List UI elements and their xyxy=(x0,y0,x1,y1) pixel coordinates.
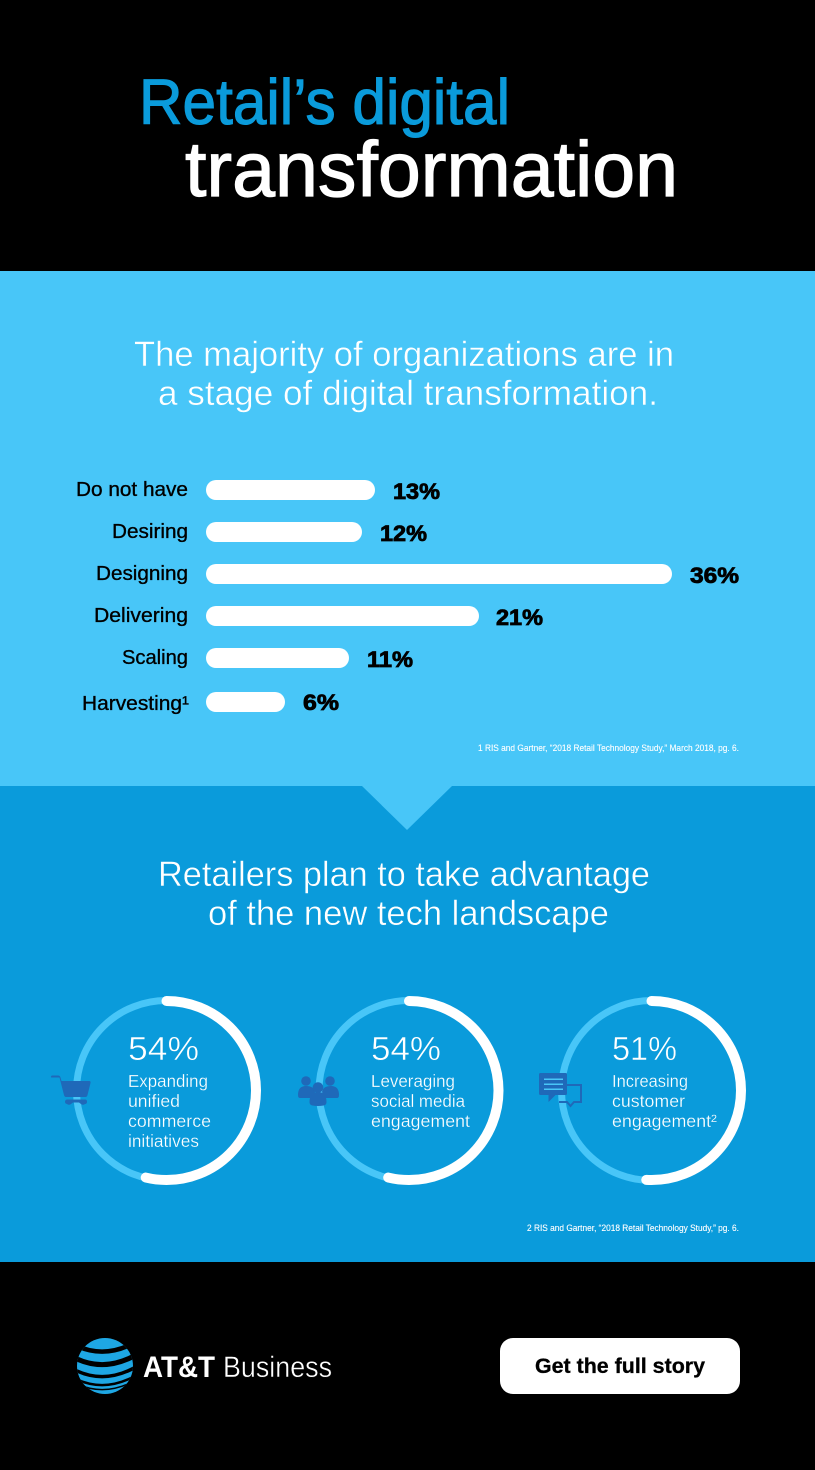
donut: customer engagement 51% xyxy=(539,1000,742,1180)
bar labels: Harvesting¹ xyxy=(82,692,189,715)
bar values: 6% xyxy=(303,690,339,715)
title: transformation xyxy=(185,125,678,213)
logo: AT&T Business xyxy=(72,1338,332,1394)
icon: chat bubbles xyxy=(539,1073,581,1106)
donut: customer engagement 51%: Increasing xyxy=(612,1071,688,1091)
bar labels: Desiring xyxy=(112,520,188,543)
bar values xyxy=(303,479,739,715)
panel: digital transformation stages xyxy=(0,271,815,787)
heading: majority of organizations: The majority of organizations are in xyxy=(134,335,674,374)
panel: tech landscape plans xyxy=(0,786,815,1262)
donut: customer engagement 51%: customer xyxy=(612,1091,685,1111)
heading: retailers plan: Retailers plan to take advantage xyxy=(158,855,650,894)
title: Retail’s digital xyxy=(139,66,510,138)
donut: social media 54%: social media xyxy=(371,1091,465,1111)
donut: social media 54% xyxy=(298,1000,499,1180)
bar values: 13% xyxy=(393,479,440,504)
bar values: 36% xyxy=(690,563,739,588)
footnote 2: 2 RIS and Gartner, “2018 Retail Technology Study,” pg. 6. xyxy=(527,1223,739,1233)
heading: retailers plan: of the new tech landscape xyxy=(208,894,609,933)
pointer triangle xyxy=(362,786,452,830)
donut: customer engagement 51%: 51% xyxy=(612,1030,677,1067)
donut: unified commerce 54%: unified xyxy=(128,1091,180,1111)
bar labels: Designing xyxy=(96,562,188,585)
bar labels: Do not have xyxy=(76,478,188,501)
bar labels: Delivering xyxy=(94,604,188,627)
bar labels xyxy=(76,478,189,715)
donut: unified commerce 54%: Expanding xyxy=(128,1071,208,1091)
logo: AT&T Business: AT&T xyxy=(143,1351,215,1384)
footnote 1: 1 RIS and Gartner, “2018 Retail Technology Study,” March 2018, pg. 6. xyxy=(478,743,739,753)
donut: social media 54%: Leveraging xyxy=(371,1071,455,1091)
bar labels: Scaling xyxy=(122,646,188,669)
button: get the full story: Get the full story xyxy=(535,1355,705,1378)
button: get the full story xyxy=(500,1338,740,1394)
title xyxy=(139,66,678,213)
heading: majority of organizations: a stage of digital transformation. xyxy=(158,374,658,413)
donut: unified commerce 54%: initiatives xyxy=(128,1131,199,1151)
donut: customer engagement 51%: engagement² xyxy=(612,1111,717,1131)
logo: AT&T Business: Business xyxy=(223,1351,332,1384)
icon: globe xyxy=(77,1338,133,1394)
bar values: 12% xyxy=(380,521,427,546)
icon: shopping cart xyxy=(51,1076,91,1105)
heading: retailers plan xyxy=(158,855,650,933)
bar values: 21% xyxy=(496,605,543,630)
donut: unified commerce 54% xyxy=(51,1000,256,1180)
donut: social media 54%: 54% xyxy=(371,1030,441,1067)
footer xyxy=(72,1338,740,1394)
bar chart: stages xyxy=(76,478,739,715)
donut: unified commerce 54%: commerce xyxy=(128,1111,211,1131)
bars xyxy=(206,480,672,712)
donut: social media 54%: engagement xyxy=(371,1111,470,1131)
heading: majority of organizations xyxy=(134,335,674,413)
icon: people xyxy=(298,1076,339,1106)
bar values: 11% xyxy=(367,647,413,672)
donut: unified commerce 54%: 54% xyxy=(128,1030,199,1067)
